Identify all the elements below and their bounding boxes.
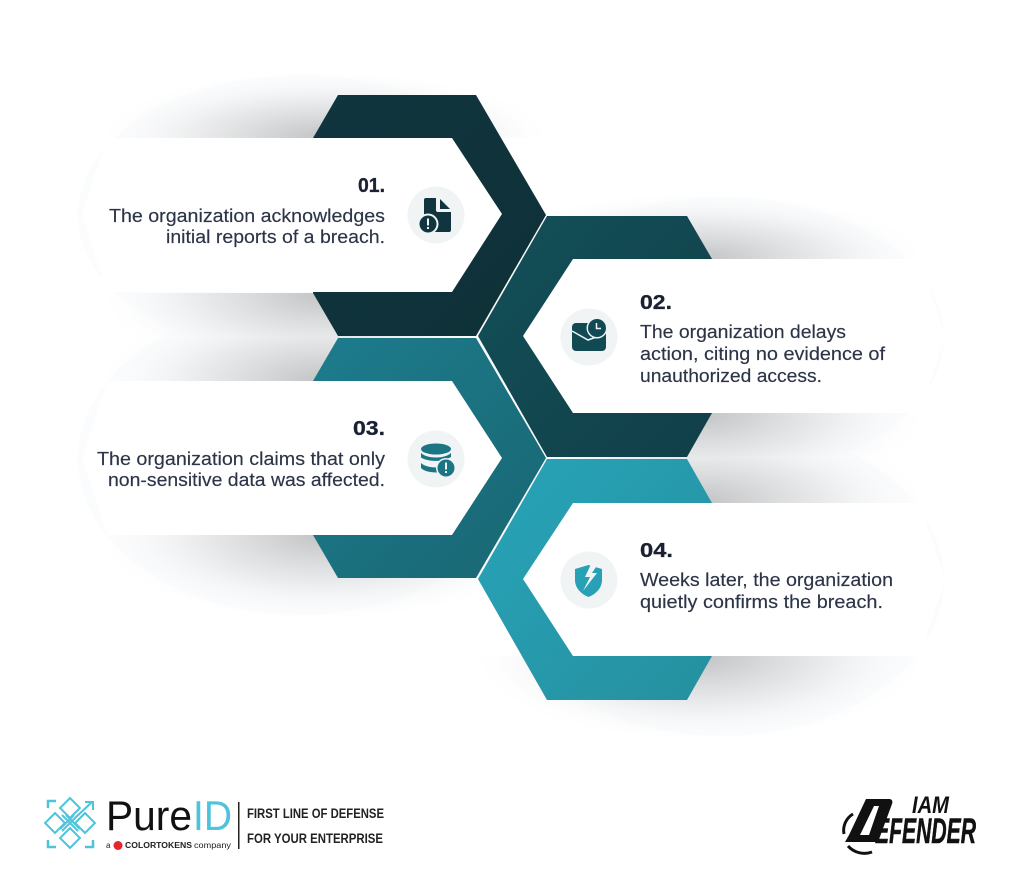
- step 02 text: action, citing no evidence of: [640, 344, 886, 364]
- step 03 text: The organization claims that only: [97, 449, 385, 469]
- step 03 number: 03.: [353, 418, 385, 440]
- step 03 text: non-sensitive data was affected.: [108, 470, 385, 490]
- step 01 text: The organization acknowledges: [109, 206, 385, 226]
- step 01 number: 01.: [358, 175, 385, 197]
- hexagon 03: [313, 338, 546, 578]
- step 02 text: [640, 322, 886, 386]
- hexagon 04: [478, 459, 712, 700]
- step 02 text: unauthorized access.: [640, 366, 822, 386]
- logo: IAM Defender: [844, 792, 976, 853]
- hexagon 02: [478, 216, 712, 457]
- slogan: FIRST LINE OF DEFENSE: [247, 806, 384, 821]
- step 04 text: [640, 570, 893, 612]
- step 04 number: 04.: [640, 540, 673, 562]
- step 02 text: The organization delays: [640, 322, 846, 342]
- hexagon 01: [313, 95, 546, 336]
- step 04 text: quietly confirms the breach.: [640, 592, 883, 612]
- panel shadows: [100, 72, 925, 741]
- slogan: [247, 806, 384, 846]
- icon: database with alert: [408, 430, 464, 488]
- step 04 text: Weeks later, the organization: [640, 570, 893, 590]
- icon: document with alert: [408, 186, 464, 244]
- panel: step 04: [523, 503, 945, 656]
- soft halo: right panels: [500, 197, 944, 736]
- icon: broken shield: [560, 552, 618, 608]
- panel: step 02: [523, 259, 945, 413]
- icon: PureID knot mark: [45, 798, 95, 848]
- ColorTokens tagline: a: [106, 841, 111, 850]
- PureID wordmark: Pure: [106, 792, 192, 839]
- step 02 number: 02.: [640, 292, 672, 314]
- panel: step 03: [82, 381, 502, 535]
- logo: PureID: ID: [193, 792, 232, 839]
- step 01 text: initial reports of a breach.: [166, 227, 385, 247]
- step 01 text: [109, 206, 385, 247]
- panel: step 01: [82, 138, 502, 292]
- logo: PureID: [45, 792, 384, 850]
- logo: IAM Defender: IAM: [912, 792, 950, 819]
- slogan: FOR YOUR ENTERPRISE: [247, 831, 383, 846]
- ColorTokens tagline: COLORTOKENS: [125, 841, 193, 850]
- step 03 text: [97, 449, 385, 490]
- soft halo: left panels: [78, 75, 522, 615]
- ColorTokens tagline: [106, 841, 231, 850]
- icon: envelope with clock: [560, 308, 618, 366]
- ColorTokens tagline: company: [194, 841, 231, 850]
